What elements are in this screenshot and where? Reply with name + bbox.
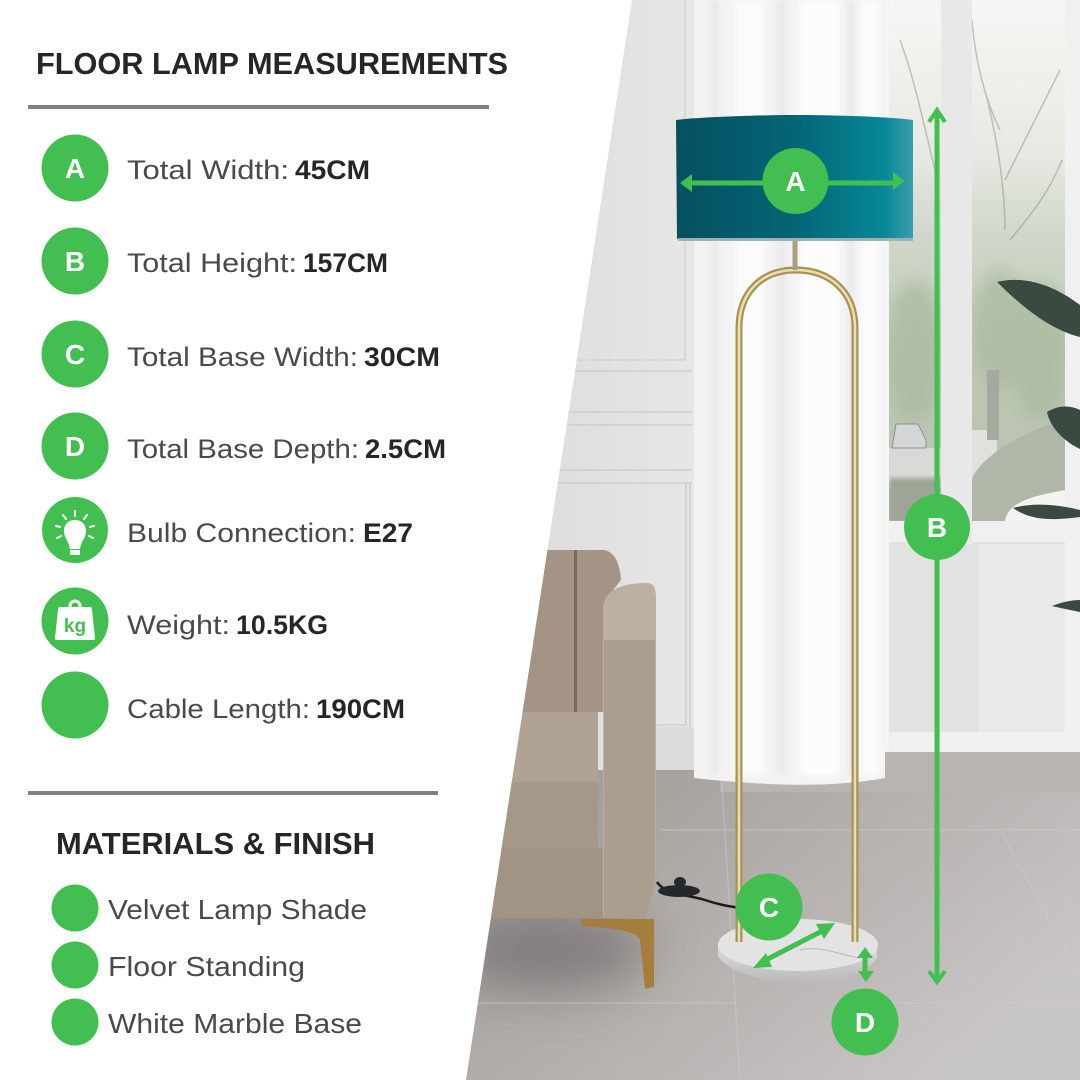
measurement row: weight: 10.5KG (236, 610, 328, 640)
wall (514, 0, 694, 770)
floor (460, 770, 1080, 1080)
title: FLOOR LAMP MEASUREMENTS (36, 46, 508, 81)
measurement row: total height: 157CM (303, 248, 388, 278)
material item: white marble base: White Marble Base (108, 1008, 362, 1039)
measurement row: cable length (42, 672, 405, 738)
measurement row: total base width: 30CM (364, 342, 440, 372)
icon: light bulb (42, 497, 108, 563)
measurement row: bulb connection (42, 497, 413, 563)
material item: white marble base (52, 998, 362, 1046)
window left frame (885, 542, 889, 732)
measurement row: total base width (42, 320, 440, 388)
heading: materials and finish: MATERIALS & FINISH (56, 826, 375, 861)
bush (972, 420, 1065, 521)
dimension B: total height (904, 110, 970, 982)
measurement row: total height: B (65, 246, 85, 277)
measurement row: total height: Total Height: (127, 248, 297, 278)
lamp shade (676, 115, 913, 239)
measurement row: cable length: 190CM (316, 694, 405, 724)
dimension C: base width: C (759, 892, 779, 923)
material item: floor standing: Floor Standing (108, 951, 305, 982)
dimension C: base width (736, 874, 835, 968)
measurement row: bulb connection: E27 (363, 518, 413, 548)
measurement row: total height (42, 228, 388, 294)
lamp base (718, 919, 878, 983)
dimension B: total height: B (927, 512, 947, 543)
sofa leg (581, 919, 654, 989)
baseboard (655, 727, 695, 771)
leaves (997, 280, 1080, 612)
material item: velvet lamp shade (52, 884, 367, 932)
material item: floor standing (52, 942, 305, 988)
curtain (694, 0, 885, 785)
measurement row: bulb connection: Bulb Connection: (127, 518, 356, 548)
measurement row: total base depth (42, 412, 446, 480)
measurement row: total base width: Total Base Width: (127, 342, 358, 372)
measurement row: total width: 45CM (295, 155, 370, 185)
measurement row: total base depth: D (65, 431, 85, 462)
measurement row: total width (42, 134, 370, 202)
material item: velvet lamp shade: Velvet Lamp Shade (108, 894, 367, 925)
measurement row: weight (42, 588, 328, 654)
dimension A: shade width: A (785, 166, 806, 197)
lamp (676, 115, 913, 983)
measurement row: total width: Total Width: (127, 155, 289, 185)
panel: room photo (450, 0, 1080, 1080)
lamp frame (739, 240, 855, 942)
parked car and path (889, 448, 941, 488)
dimension A: shade width (680, 148, 905, 214)
window mullion (941, 0, 972, 545)
dimension D: base depth: D (855, 1007, 875, 1038)
measurement row: total base depth: 2.5CM (365, 434, 446, 464)
dimension D: base depth (832, 947, 898, 1056)
measurement row: weight: Weight: (127, 610, 230, 640)
tree trunk and road (972, 430, 997, 480)
measurement row: total width: A (65, 153, 85, 184)
icon: kg weight: kg (64, 616, 86, 637)
wall below window (885, 522, 1080, 752)
floor switch and cable (657, 877, 740, 908)
measurement row: total base depth: Total Base Depth: (127, 434, 359, 464)
sofa (490, 550, 656, 918)
measurement row: total base width: C (65, 339, 85, 370)
icon: kg weight (42, 588, 108, 654)
measurement row: cable length: Cable Length: (127, 694, 310, 724)
window with trees (889, 0, 1065, 521)
wall panelling (555, 0, 692, 728)
